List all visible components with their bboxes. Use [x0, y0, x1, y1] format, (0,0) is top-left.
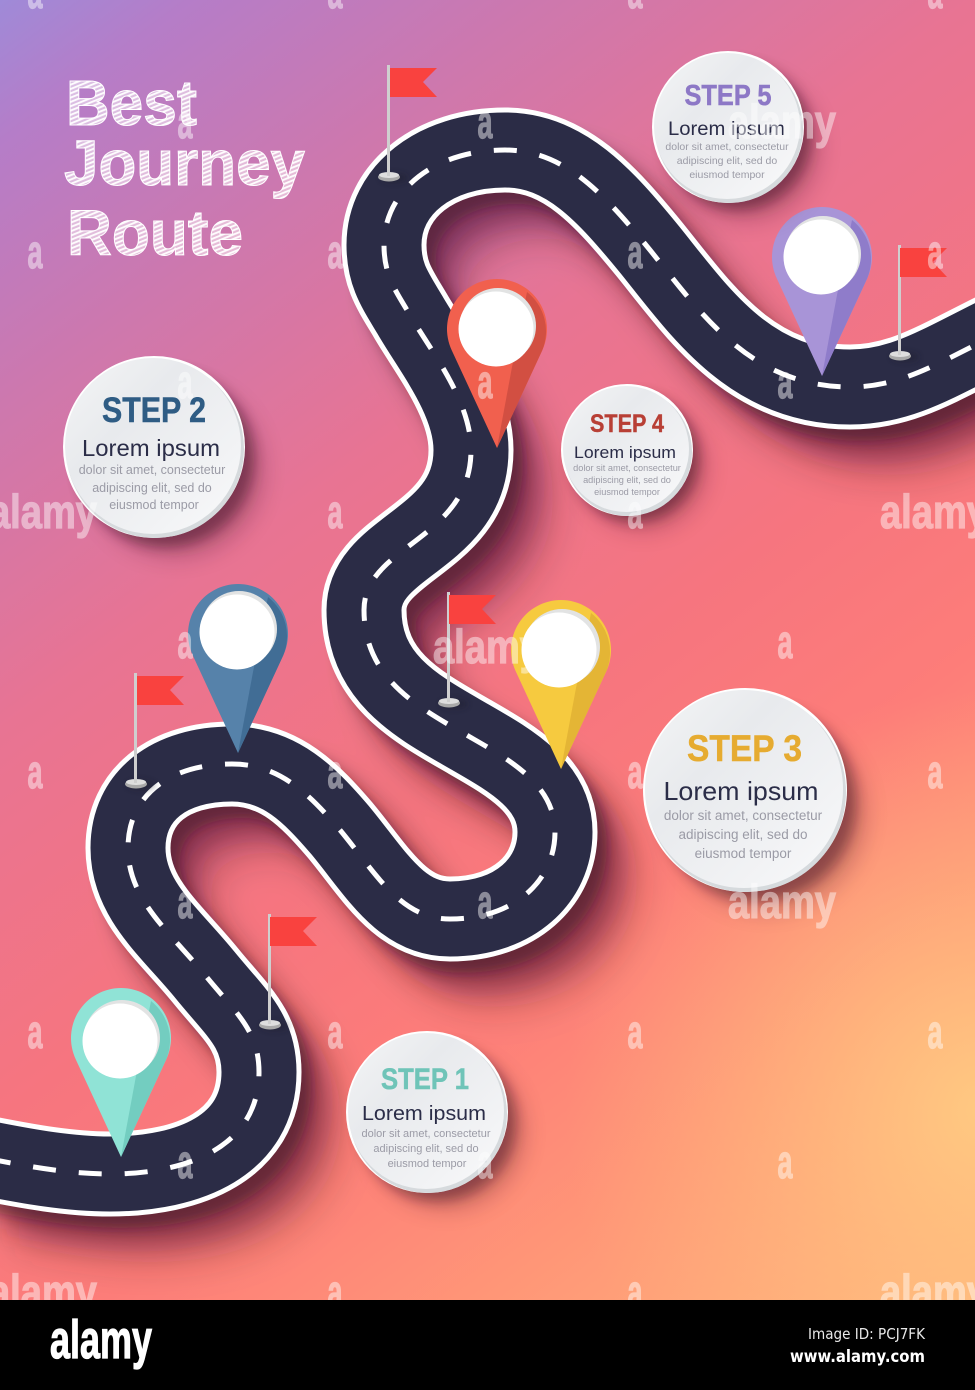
step 1 badge — [346, 1031, 523, 1208]
step 4 heading: STEP 4 — [590, 410, 664, 438]
step 2 body text: eiusmod tempor — [109, 498, 199, 512]
step 5 badge — [652, 51, 818, 219]
title — [64, 67, 305, 269]
step 2 subheading: Lorem ipsum — [82, 435, 220, 461]
step 4 badge — [561, 384, 705, 529]
step 1 body text: adipiscing elit, sed do — [373, 1143, 479, 1155]
watermark pattern: a — [28, 1005, 43, 1058]
watermark pattern: a — [928, 1005, 943, 1058]
watermark pattern: a — [328, 745, 343, 798]
watermark pattern: a — [778, 1135, 793, 1188]
watermark pattern: a — [328, 1265, 343, 1318]
winding road — [0, 150, 975, 1174]
watermark pattern: a — [928, 745, 943, 798]
pin: purple — [772, 207, 872, 376]
step 2 body text: adipiscing elit, sed do — [92, 481, 212, 495]
watermark pattern: a — [328, 1005, 343, 1058]
watermark pattern: a — [178, 355, 193, 408]
watermark pattern: a — [778, 615, 793, 668]
watermark pattern: a — [28, 225, 43, 278]
step 3 badge — [643, 688, 864, 910]
title: Best — [66, 67, 197, 139]
footer logo: alamy — [50, 1310, 152, 1370]
step 5 body text: eiusmod tempor — [689, 169, 765, 181]
step 3 subheading: Lorem ipsum — [664, 776, 818, 806]
image id: Image ID: PCJ7FK — [808, 1325, 926, 1343]
step 2 badge — [63, 356, 262, 556]
step 2 heading: STEP 2 — [102, 391, 206, 430]
watermark pattern: a — [628, 745, 643, 798]
step 3 body text: dolor sit amet, consectetur — [664, 808, 823, 823]
watermark pattern: a — [478, 355, 493, 408]
watermark pattern: a — [178, 615, 193, 668]
watermark pattern: a — [478, 1135, 493, 1188]
step 2 body text: dolor sit amet, consectetur — [79, 463, 225, 477]
website: www.alamy.com — [790, 1347, 925, 1367]
flag 3 middle — [438, 592, 496, 709]
flag 1 lower — [259, 914, 317, 1031]
step 4 body text: eiusmod tempor — [594, 487, 660, 497]
watermark pattern: a — [478, 95, 493, 148]
watermark pattern: a — [178, 95, 193, 148]
step 5 body text: adipiscing elit, sed do — [677, 155, 777, 167]
watermark pattern: a — [628, 225, 643, 278]
step 1 heading: STEP 1 — [381, 1063, 469, 1096]
watermark pattern: a — [628, 1265, 643, 1318]
step 5 heading: STEP 5 — [684, 80, 772, 112]
step 1 subheading: Lorem ipsum — [362, 1103, 486, 1125]
step 3 heading: STEP 3 — [687, 728, 802, 769]
pin: yellow — [511, 600, 611, 769]
watermark pattern: a — [928, 225, 943, 278]
pin: blue — [188, 584, 288, 753]
road shadow — [0, 164, 975, 1222]
watermark pattern: a — [328, 225, 343, 278]
footer bar — [0, 1300, 975, 1390]
step 1 body text: eiusmod tempor — [388, 1158, 467, 1170]
step 5 subheading: Lorem ipsum — [668, 119, 785, 140]
watermark pattern: alamy — [433, 620, 541, 673]
pin: red — [447, 279, 547, 448]
title: Route — [67, 197, 243, 269]
step 1 body text: dolor sit amet, consectetur — [361, 1128, 491, 1140]
pin: teal — [71, 988, 171, 1157]
flag 5 top — [378, 65, 437, 183]
watermark pattern: a — [628, 485, 643, 538]
watermark pattern: alamy — [728, 875, 836, 928]
watermark pattern: a — [178, 1135, 193, 1188]
step 4 subheading: Lorem ipsum — [574, 444, 676, 462]
title: Journey — [64, 127, 305, 199]
step 5 body text: dolor sit amet, consectetur — [665, 141, 789, 153]
watermark pattern: a — [328, 485, 343, 538]
step 3 body text: eiusmod tempor — [695, 846, 792, 861]
step 4 body text: adipiscing elit, sed do — [583, 475, 671, 485]
watermark pattern: a — [778, 355, 793, 408]
watermark pattern: a — [628, 1005, 643, 1058]
step 4 body text: dolor sit amet, consectetur — [573, 463, 681, 473]
watermark pattern: a — [28, 745, 43, 798]
flag 4 right — [889, 245, 947, 362]
watermark pattern: alamy — [728, 95, 836, 148]
step 3 body text: adipiscing elit, sed do — [678, 827, 808, 842]
watermark pattern: a — [178, 875, 193, 928]
watermark pattern: a — [478, 875, 493, 928]
flag 2 left — [125, 673, 184, 790]
